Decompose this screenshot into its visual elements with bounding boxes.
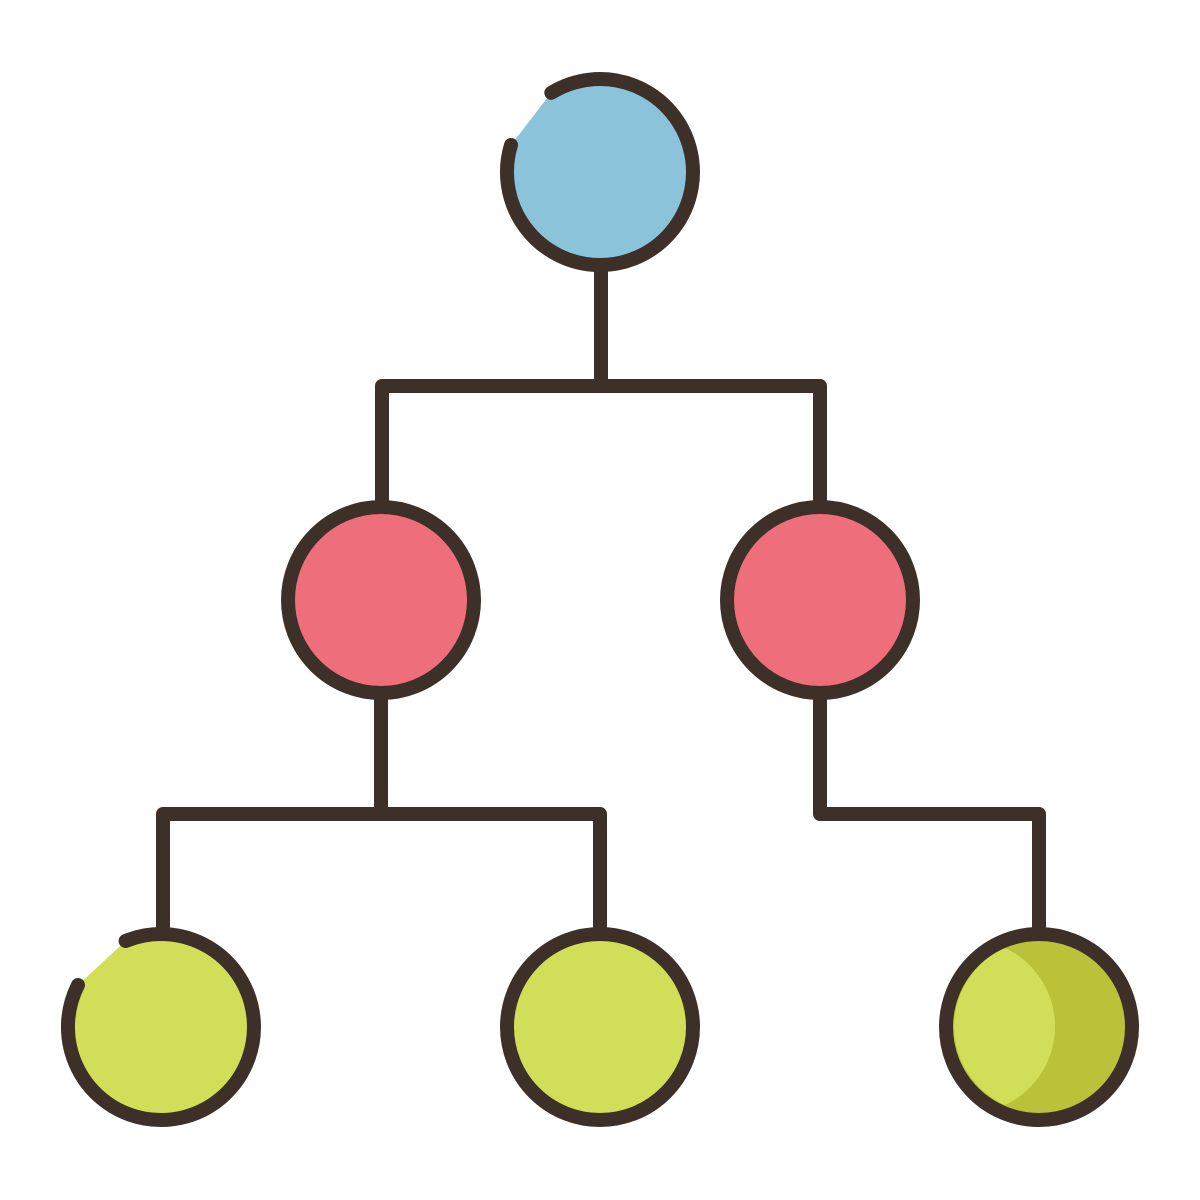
connector: left red node to green children: [163, 698, 600, 932]
node: left green circle with gap: [68, 934, 254, 1120]
outline: left green circle: [68, 934, 254, 1120]
node: left red circle: [288, 507, 474, 693]
node: blue root circle with gap: [507, 79, 693, 265]
connector: right red node to green child: [820, 698, 1039, 932]
connector: root to level two: [382, 270, 820, 505]
node: right green circle with shading: [946, 934, 1132, 1120]
node: right red circle: [727, 507, 913, 693]
node: middle green circle: [507, 934, 693, 1120]
outline: blue root circle: [507, 79, 693, 265]
